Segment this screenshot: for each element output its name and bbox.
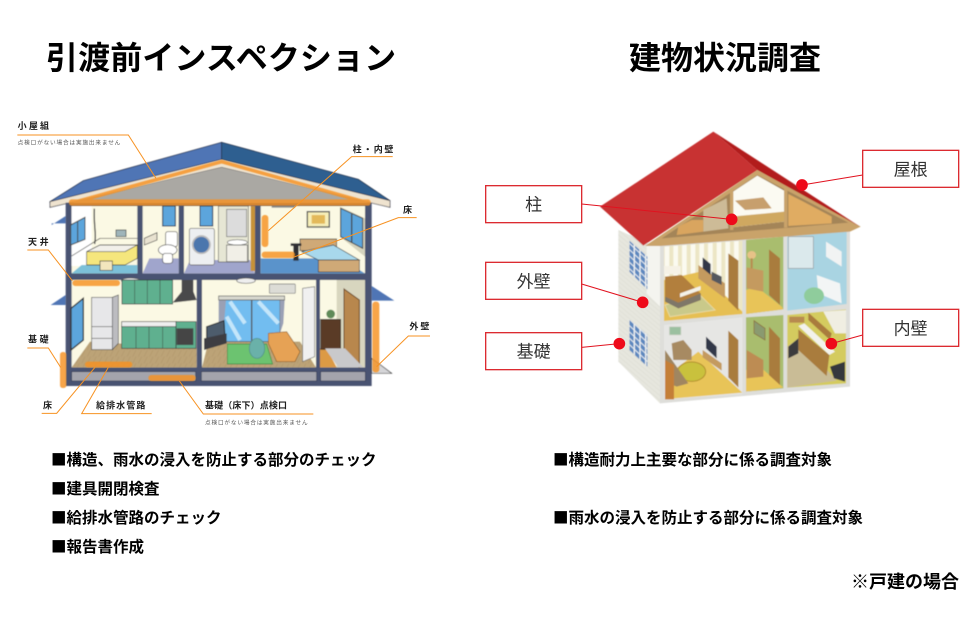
- callout labels: [18, 120, 429, 426]
- callout labels: 基礎（床下）点検口: [205, 399, 287, 410]
- side wall: [618, 230, 660, 403]
- callout labels: 点検口がない場合は実施出来ません: [205, 418, 308, 426]
- house body: [600, 132, 861, 403]
- label: roof: [863, 150, 959, 187]
- label: exterior wall: [486, 262, 582, 299]
- item: ■構造、雨水の浸入を防止する部分のチェック: [51, 448, 377, 470]
- label: foundation: 基礎: [517, 343, 551, 362]
- diagram: cutaway house with orange callouts: [17, 120, 430, 426]
- toilet: [166, 232, 177, 247]
- note: detached house: ※戸建の場合: [851, 572, 959, 592]
- front frame: [660, 227, 850, 403]
- marker dots: [614, 179, 837, 350]
- callout labels: 基礎: [28, 334, 49, 345]
- label: interior wall: [863, 309, 959, 346]
- hall lower: [746, 315, 783, 392]
- roof: [600, 132, 757, 246]
- callout labels: 小屋組: [18, 120, 49, 131]
- bedroom: [664, 241, 742, 321]
- left windows: [71, 217, 85, 245]
- living: [223, 300, 280, 342]
- label: interior wall: 内壁: [894, 320, 928, 339]
- bedroom: [307, 212, 329, 227]
- callout labels: 天井: [28, 236, 49, 247]
- callout labels: 床: [43, 401, 52, 411]
- attic: [645, 170, 861, 246]
- house structure: [50, 142, 394, 386]
- label: pillar: [486, 186, 582, 223]
- item: ■給排水管路のチェック: [51, 506, 222, 528]
- item: ■報告書作成: [51, 535, 144, 557]
- bath: [87, 245, 137, 265]
- list: inspection items: [51, 448, 377, 557]
- callout labels: 外壁: [409, 321, 429, 332]
- label: foundation: [486, 333, 582, 370]
- item: ■構造耐力上主要な部分に係る調査対象: [553, 448, 832, 470]
- washer: [189, 228, 214, 265]
- callout labels: 給排水管路: [96, 399, 145, 410]
- callouts and connectors: [582, 175, 863, 347]
- living: [664, 317, 742, 399]
- kitchen: [787, 309, 846, 388]
- callout labels: 床: [403, 205, 412, 215]
- label: exterior wall: 外壁: [517, 272, 551, 291]
- callout labels: 柱・内壁: [353, 143, 393, 154]
- title: inspection: 引渡前インスペクション: [46, 40, 396, 76]
- diagram: isometric house with red callouts: [485, 131, 960, 404]
- item: ■雨水の浸入を防止する部分に係る調査対象: [553, 506, 863, 528]
- title: building survey: 建物状況調査: [629, 40, 821, 76]
- label: roof: 屋根: [894, 161, 928, 180]
- list: survey items: [553, 448, 863, 528]
- entrance: [337, 280, 365, 367]
- bathroom: [787, 232, 847, 311]
- label: pillar: 柱: [525, 196, 542, 215]
- kitchen: [121, 278, 140, 283]
- hall upper: [746, 237, 783, 314]
- callout labels: 点検口がない場合は実施出来ません: [18, 138, 121, 146]
- orange highlights: [60, 162, 379, 388]
- leader lines: [17, 135, 430, 414]
- item: ■建具開閉検査: [51, 477, 160, 499]
